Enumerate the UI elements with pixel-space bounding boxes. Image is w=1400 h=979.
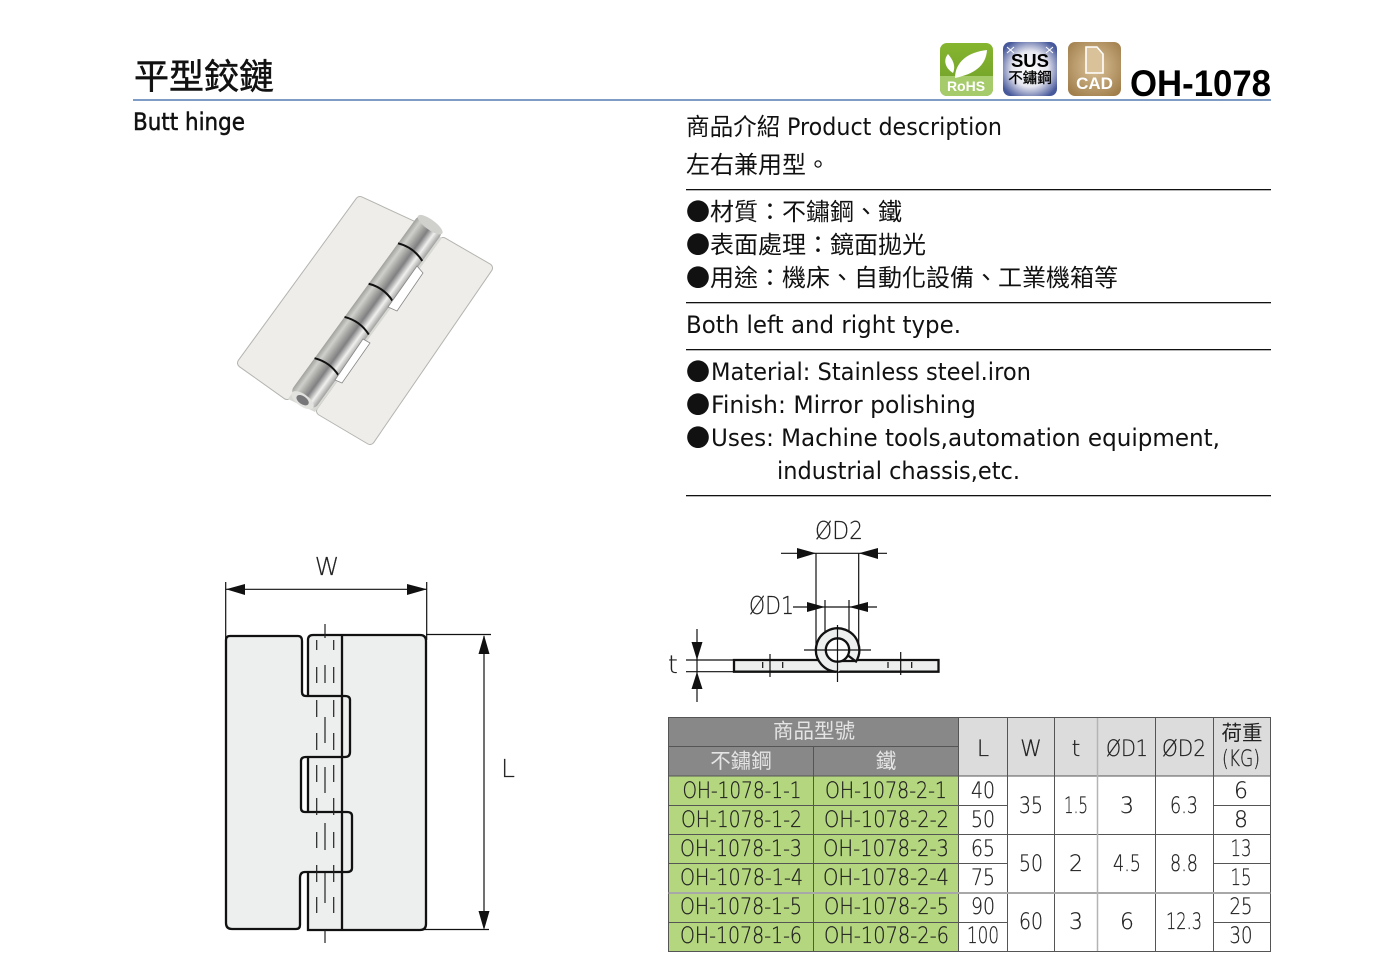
product photo: hinge xyxy=(242,201,488,440)
icon: CAD badge: CAD xyxy=(1076,74,1113,93)
table rows: OH-1078-2-5 xyxy=(824,895,949,920)
front view drawing with W and L dimensions: W xyxy=(315,552,339,581)
title: 平型鉸鏈 xyxy=(134,58,274,97)
subtitle: Butt hinge xyxy=(133,108,245,136)
table rows: 13 xyxy=(1230,837,1252,862)
table header: 商品型號 xyxy=(773,720,855,743)
table rows: OH-1078-2-4 xyxy=(823,866,949,891)
English description: Both left and right type. xyxy=(686,311,961,339)
table header: t xyxy=(1072,737,1080,762)
table header: 荷重 xyxy=(1222,722,1262,745)
table rows: OH-1078-1-4 xyxy=(680,866,803,891)
English spec list: Uses: Machine tools,automation equipment, xyxy=(711,424,1220,452)
table rows: OH-1078-1-5 xyxy=(680,895,802,920)
table rows: 6 xyxy=(1234,779,1248,804)
table rows: 4.5 xyxy=(1113,852,1141,877)
English spec list: ● xyxy=(686,352,710,387)
section view drawing with t, ØD1, ØD2 dimensions: ØD2 xyxy=(815,516,863,545)
table rows: 60 xyxy=(1019,910,1043,935)
table header: W xyxy=(1020,737,1042,762)
table rows: 3 xyxy=(1120,794,1134,819)
description: left and right use: 左右兼用型。 xyxy=(686,152,830,179)
Chinese spec list xyxy=(686,192,1118,293)
table header: 鐵 xyxy=(876,750,896,773)
table header: L xyxy=(977,737,989,762)
table rows: 90 xyxy=(971,895,995,920)
table header: ØD1 xyxy=(1106,737,1148,762)
icon: RoHS badge xyxy=(940,43,993,96)
section view drawing with t, ØD1, ØD2 dimensions xyxy=(668,516,938,702)
English spec list: ● xyxy=(686,385,710,420)
table rows: 40 xyxy=(971,779,995,804)
table header xyxy=(668,718,1270,776)
table rows: 6.3 xyxy=(1170,794,1198,819)
Chinese spec list: 表面處理：鏡面拋光 xyxy=(710,232,926,259)
front view drawing with W and L dimensions xyxy=(226,552,515,943)
section view drawing with t, ØD1, ØD2 dimensions: t xyxy=(668,650,678,679)
table header: ØD2 xyxy=(1162,737,1206,762)
table rows: OH-1078-2-1 xyxy=(825,779,947,804)
English spec list: Material: Stainless steel.iron xyxy=(711,358,1031,386)
table rows: 3 xyxy=(1069,910,1083,935)
model number: OH-1078 xyxy=(1130,63,1271,104)
English spec list: Finish: Mirror polishing xyxy=(711,391,976,419)
icon: SUS badge: SUS xyxy=(1011,50,1049,71)
table rows: OH-1078-1-6 xyxy=(680,924,802,949)
table rows: 50 xyxy=(971,808,995,833)
table rows: OH-1078-1-3 xyxy=(680,837,802,862)
Chinese spec list: 材質：不鏽鋼、鐵 xyxy=(710,199,902,226)
description heading xyxy=(686,113,1002,141)
English spec list: industrial chassis,etc. xyxy=(777,457,1020,485)
icon: SUS badge: 不鏽鋼 xyxy=(1008,70,1052,87)
Chinese spec list: 用途：機床、自動化設備、工業機箱等 xyxy=(710,265,1118,292)
table rows: 15 xyxy=(1230,866,1252,891)
table rows: 25 xyxy=(1230,895,1252,920)
Chinese spec list: ● xyxy=(686,192,710,227)
table rows: 6 xyxy=(1120,910,1134,935)
spec table xyxy=(668,718,1270,952)
English spec list: ● xyxy=(686,418,710,453)
table rows: 100 xyxy=(967,924,999,949)
front view drawing with W and L dimensions: L xyxy=(501,754,515,783)
Chinese spec list: ● xyxy=(686,258,710,293)
table rows: OH-1078-2-6 xyxy=(824,924,949,949)
English spec list xyxy=(686,352,1220,485)
table rows xyxy=(680,779,1252,949)
table rows: 50 xyxy=(1019,852,1043,877)
icon: CAD badge xyxy=(1068,42,1121,96)
table rows: OH-1078-2-3 xyxy=(823,837,949,862)
table rows: 12.3 xyxy=(1166,910,1202,935)
icon: RoHS badge: RoHS xyxy=(947,78,985,94)
icon: SUS badge xyxy=(1003,42,1057,96)
table rows: OH-1078-1-1 xyxy=(682,779,802,804)
table header: 不鏽鋼 xyxy=(710,750,772,773)
Chinese spec list: ● xyxy=(686,225,710,260)
table rows: 2 xyxy=(1069,852,1083,877)
table rows: 8.8 xyxy=(1170,852,1198,877)
table rows: 75 xyxy=(971,866,995,891)
table header: (KG) xyxy=(1222,747,1260,772)
table rows: OH-1078-1-2 xyxy=(681,808,802,833)
table rows: 1.5 xyxy=(1064,794,1088,819)
description heading: Product description xyxy=(787,113,1002,141)
table rows: 30 xyxy=(1230,924,1252,949)
table rows: OH-1078-2-2 xyxy=(824,808,949,833)
table rows: 65 xyxy=(971,837,995,862)
section view drawing with t, ØD1, ØD2 dimensions: ØD1 xyxy=(749,591,794,620)
table rows: 35 xyxy=(1019,794,1043,819)
table rows: 8 xyxy=(1234,808,1248,833)
description heading: 商品介紹 xyxy=(686,114,780,141)
